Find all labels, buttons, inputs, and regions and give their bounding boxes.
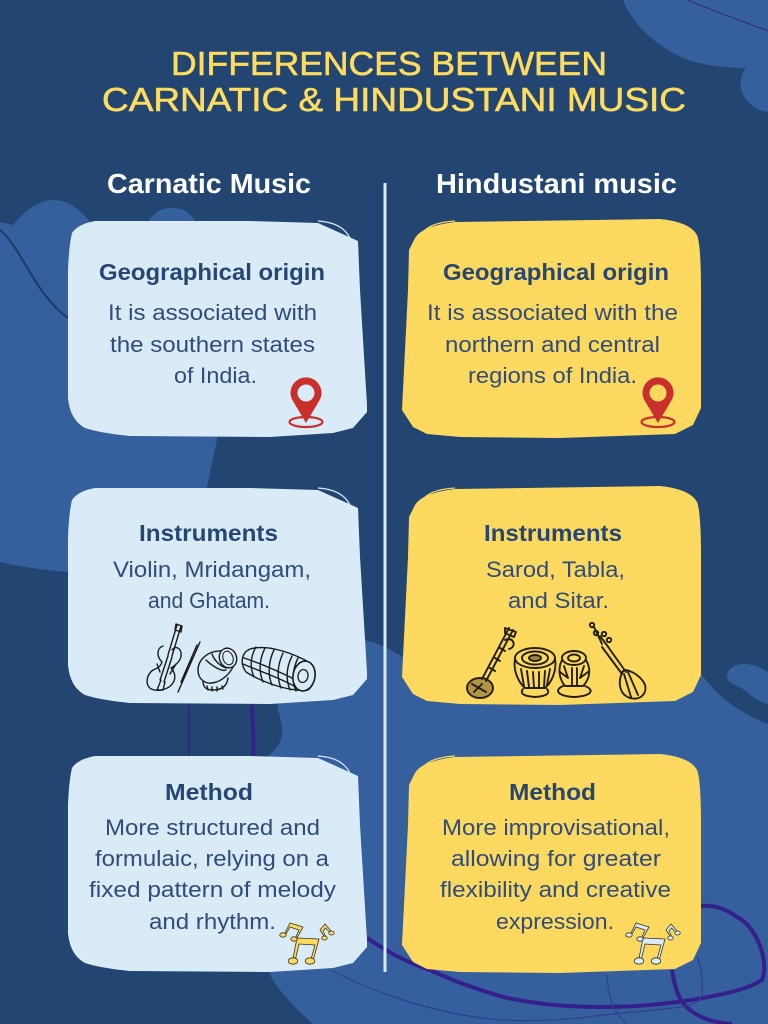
title: DIFFERENCES BETWEEN (171, 45, 607, 82)
column heading: Hindustani music: Hindustani music (436, 168, 677, 199)
icon: map pin (290, 377, 322, 427)
body text: northern and central (445, 332, 660, 357)
body text: allowing for greater (451, 846, 662, 871)
body text: It is associated with (108, 300, 317, 325)
heading: Instruments (484, 520, 622, 546)
panel: Carnatic method (68, 756, 367, 972)
body text: and rhythm. (149, 909, 276, 934)
heading: Geographical origin (99, 259, 325, 285)
icon: mridangam (242, 647, 317, 693)
panel: Hindustani instruments (402, 486, 701, 705)
panel: Carnatic instruments (68, 488, 367, 704)
body text: and Ghatam. (148, 588, 270, 613)
icon: tabla large (515, 648, 555, 697)
panel: Carnatic geographical origin (68, 221, 367, 437)
body text: and Sitar. (508, 588, 609, 613)
body text: expression. (496, 909, 614, 934)
icon: sitar (467, 628, 516, 698)
body text (486, 557, 625, 613)
body text: of India. (174, 363, 257, 388)
icon: music notes (280, 923, 334, 964)
icon: tabla small (558, 651, 591, 697)
body text (440, 815, 671, 934)
icon: violin (147, 624, 182, 690)
body text (113, 557, 311, 613)
column heading: Carnatic Music: Carnatic Music (107, 168, 311, 199)
icon: music notes (626, 923, 680, 964)
panel: Hindustani geographical origin (402, 219, 701, 438)
heading: Method (509, 779, 596, 805)
body text: Sarod, Tabla, (486, 557, 625, 582)
body text: More improvisational, (442, 815, 670, 840)
icon: veena (590, 623, 645, 699)
title (102, 45, 686, 118)
panel: Hindustani method (402, 754, 701, 973)
heading: Instruments (139, 520, 278, 546)
heading: Method (165, 779, 253, 805)
body text: fixed pattern of melody (89, 877, 337, 902)
body text (108, 300, 317, 388)
body text: More structured and (105, 815, 320, 840)
body text: It is associated with the (427, 300, 678, 325)
icon: map pin (642, 377, 674, 427)
icon: ghatam (198, 646, 239, 691)
body text (427, 300, 678, 388)
body text: the southern states (110, 332, 315, 357)
body text (89, 815, 337, 934)
icon: bow (178, 642, 200, 692)
body text: Violin, Mridangam, (113, 557, 311, 582)
body text: flexibility and creative (440, 877, 671, 902)
body text: regions of India. (468, 363, 637, 388)
heading: Geographical origin (443, 259, 669, 285)
body text: formulaic, relying on a (95, 846, 330, 871)
center divider (384, 183, 386, 972)
title: CARNATIC & HINDUSTANI MUSIC (102, 81, 686, 118)
